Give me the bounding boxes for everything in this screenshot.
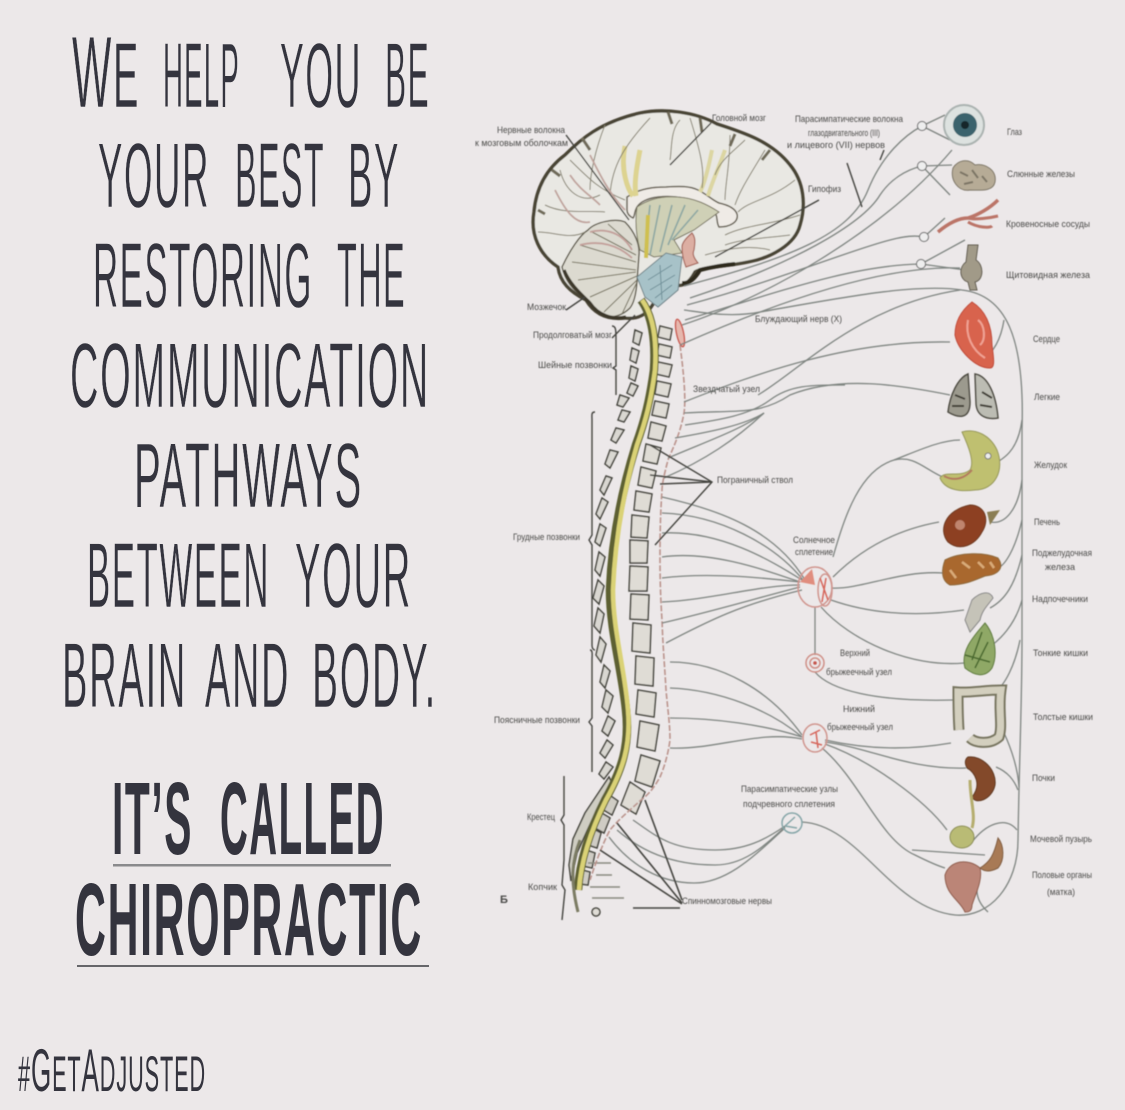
main message heading: BEST: [235, 125, 325, 227]
cerebellum: [562, 220, 639, 318]
main message heading: BRAIN: [62, 625, 187, 727]
text: BE: [385, 25, 430, 127]
inferior mesenteric plexus: [803, 724, 827, 752]
diagram labels: Слюнные железы: [1007, 169, 1075, 179]
diagram labels: Звездчатый узел: [693, 384, 760, 394]
diagram labels: Надпочечники: [1032, 594, 1088, 604]
main message heading: THE: [337, 225, 406, 327]
diagram labels: Глаз: [1007, 127, 1022, 137]
diagram labels: Парасимпатические узлы: [741, 784, 838, 794]
diagram labels: Мочевой пузырь: [1030, 834, 1092, 844]
organ: kidney and ureter: [965, 757, 995, 828]
diagram labels: к мозговым оболочкам: [475, 138, 568, 148]
organ: uterus: [945, 838, 1003, 912]
diagram labels: Поджелудочная: [1032, 548, 1092, 558]
main message heading: RESTORING: [93, 225, 313, 327]
corpus callosum: [627, 186, 737, 227]
main message heading: AND: [205, 625, 290, 727]
diagram labels: Нервные волокна: [497, 125, 565, 135]
diagram labels: Толстые кишки: [1033, 712, 1093, 722]
diagram labels: Легкие: [1034, 392, 1060, 402]
diagram labels: Верхний: [840, 648, 870, 658]
diagram labels: сплетение: [795, 547, 833, 557]
diagram labels: Мозжечок: [527, 302, 566, 312]
diagram labels: Блуждающий нерв (X): [755, 314, 842, 324]
main message heading: HELP: [163, 25, 240, 127]
diagram labels: Половые органы: [1032, 870, 1092, 880]
diagram labels: Сердце: [1033, 334, 1060, 344]
vagus ganglion: [674, 319, 686, 347]
diagram labels: Парасимпатические волокна: [795, 114, 903, 124]
diagram labels: Продолговатый мозг: [533, 330, 613, 340]
organ: salivary glands: [918, 161, 995, 190]
organ: pancreas: [943, 554, 1001, 585]
diagram labels: Крестец: [527, 812, 555, 822]
organ: thyroid: [916, 245, 982, 290]
diagram labels: железа: [1045, 562, 1075, 572]
organ: eye: [918, 105, 984, 145]
main message heading: BETWEEN: [87, 525, 270, 627]
diagram labels: Печень: [1034, 517, 1060, 527]
organ: liver: [944, 505, 1000, 547]
call-out heading: it's called chiropractic: [75, 761, 429, 977]
organ: heart: [955, 302, 994, 368]
diagram labels: Гипофиз: [808, 184, 841, 194]
text: CHIROPRACTIC: [75, 862, 423, 977]
diagram labels: Головной мозг: [712, 113, 767, 123]
diagram labels: глазодвигательного (III): [808, 128, 880, 138]
vertebral column: [569, 326, 685, 916]
organ: lungs: [948, 374, 998, 418]
diagram labels: брыжеечный узел: [827, 722, 893, 732]
brain: [533, 111, 819, 338]
hypothalamus shadow: [682, 264, 735, 283]
diagram labels: брыжеечный узел: [826, 667, 892, 677]
superior mesenteric ganglion: [806, 654, 824, 672]
main message heading: PATHWAYS: [134, 425, 363, 527]
nervous system diagram: [475, 105, 1093, 920]
diagram labels: (матка): [1047, 887, 1075, 897]
diagram labels: и лицевого (VII) нервов: [787, 140, 885, 150]
main message heading: YOUR: [295, 525, 412, 627]
organ: large intestine: [958, 690, 1001, 742]
call-out heading: it's called chiropractic: IT’S: [112, 761, 193, 876]
text: BODY.: [312, 625, 437, 727]
main message heading: YOUR: [98, 125, 210, 227]
coccyx nerve roots: [588, 863, 624, 898]
main message heading: WE: [72, 17, 140, 129]
diagram labels: Грудные позвонки: [513, 532, 580, 542]
solar plexus nerves: [662, 440, 964, 700]
organ: small intestine: [964, 623, 995, 675]
text: CALLED: [220, 761, 385, 876]
brain stem: [637, 253, 682, 307]
diagram labels: Пограничный ствол: [717, 475, 793, 485]
diagram labels: Б: [500, 894, 508, 906]
diagram labels: Шейные позвонки: [538, 360, 612, 370]
diagram labels: подчревного сплетения: [743, 799, 835, 809]
diagram labels: Поясничные позвонки: [494, 715, 580, 725]
text: COMMUNICATION: [70, 325, 430, 427]
diagram labels: [475, 113, 1093, 906]
brain stem and spinal cord: [573, 300, 655, 912]
upper nerves to head and neck organs: [664, 115, 1022, 915]
ganglion chain: [590, 345, 685, 880]
pelvic plexus: [782, 813, 802, 833]
thalamus and midbrain: [636, 197, 719, 257]
organ: adrenal gland / spleen: [965, 593, 993, 632]
diagram labels: Солнечное: [793, 535, 835, 545]
diagram labels: Тонкие кишки: [1033, 648, 1088, 658]
inferior mesenteric plexus nerves: [670, 662, 985, 868]
hashtag: #GETADJUSTED: [18, 1037, 206, 1104]
spinous processes: [569, 330, 642, 881]
vertebral bodies: [580, 326, 672, 916]
main message heading: YOU: [280, 25, 362, 127]
main message heading: BY: [348, 125, 400, 227]
organ: stomach: [940, 431, 1000, 491]
diagram labels: Кровеносные сосуды: [1006, 219, 1090, 229]
diagram labels: Нижний: [843, 704, 875, 714]
organ: blood vessels: [920, 200, 998, 242]
pelvic plexus nerves: [609, 820, 785, 883]
solar plexus: [798, 567, 832, 607]
main message heading: [62, 17, 437, 727]
organ: bladder: [950, 826, 974, 848]
diagram labels: Щитовидная железа: [1006, 270, 1090, 280]
pointer lines and brackets: [561, 150, 884, 920]
diagram labels: Копчик: [528, 882, 557, 892]
diagram labels: Почки: [1032, 773, 1055, 783]
diagram labels: Желудок: [1034, 460, 1067, 470]
diagram labels: Спинномозговые нервы: [682, 896, 772, 906]
